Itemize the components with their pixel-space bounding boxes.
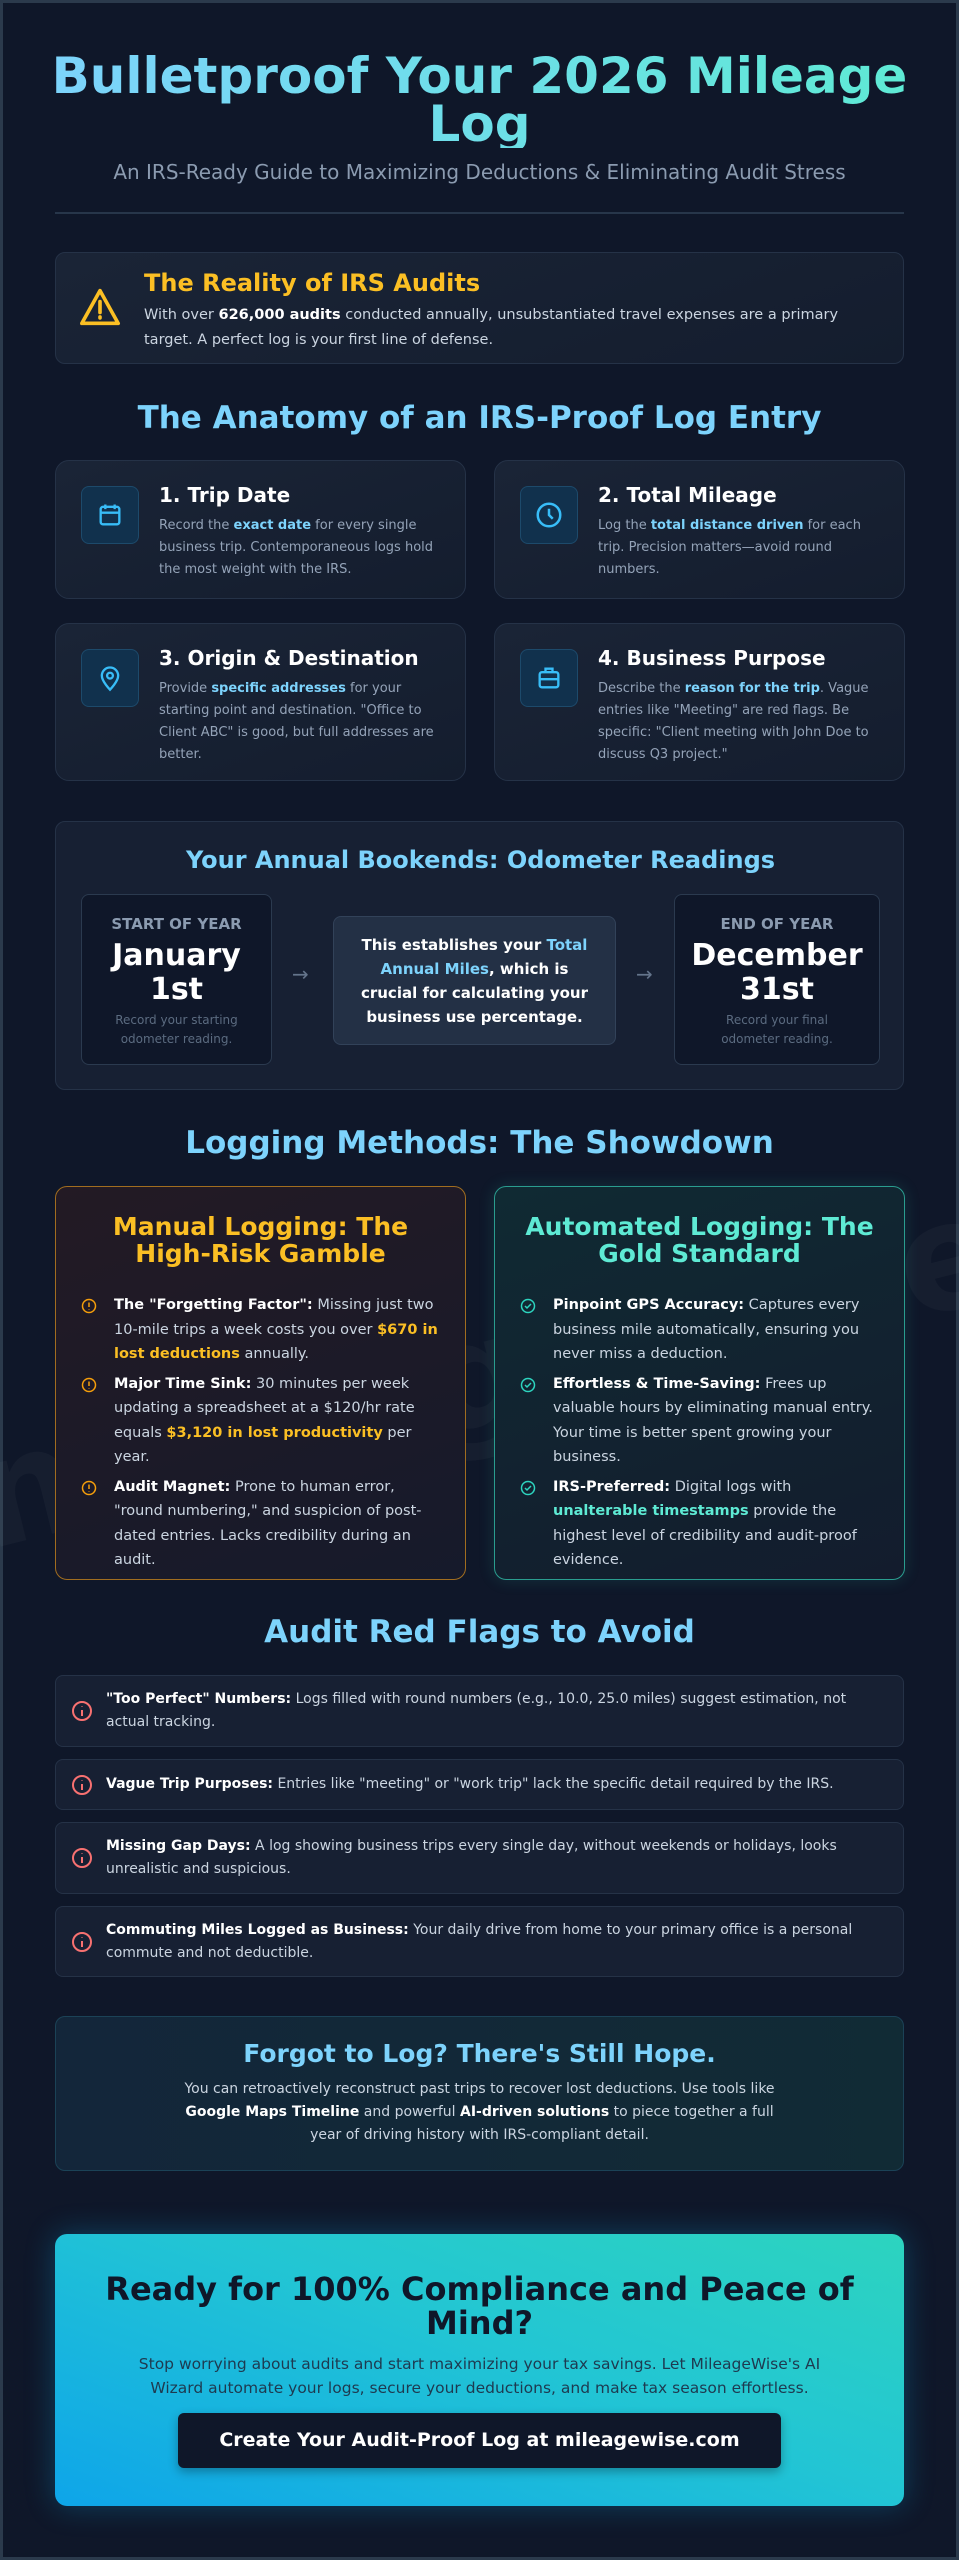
flag 3 [55,1822,904,1894]
flag 1 [55,1675,904,1747]
start of year: odometer reading. [121,1032,232,1046]
heading: logging methods: Logging Methods: The Showdown [185,1125,774,1161]
start of year [81,894,272,1065]
total annual miles callout: This establishes your Total Annual Miles, which is crucial for calculating your business use percentage. [361,936,588,1026]
panel: CTA: Ready for 100% Compliance and Peace of Mind? [105,2270,854,2342]
subtitle: An IRS-Ready Guide to Maximizing Deductions & Eliminating Audit Stress [113,160,846,184]
panel: manual logging [55,1186,466,1580]
manual item 2: Major Time Sink: 30 minutes per week updating a spreadsheet at a $120/hr rate equals $3,120 in lost productivity per year. [114,1376,415,1465]
start of year: START OF YEAR [111,915,242,933]
auto item 2: Effortless & Time-Saving: Frees up valuable hours by eliminating manual entry. Your time is better spent growing your business. [553,1376,873,1465]
audit text [144,269,838,348]
auto item 1: Pinpoint GPS Accuracy: Captures every business mile automatically, ensuring you never miss a deduction. [553,1297,859,1362]
card: origin destination [55,623,466,781]
card: total mileage: 2. Total Mileage [598,483,777,507]
flag 3: Missing Gap Days: A log showing business trips every single day, without weekends or holidays, looks unrealistic and suspicious. [106,1838,837,1877]
heading: red flags: Audit Red Flags to Avoid [264,1614,695,1650]
audit text: The Reality of IRS Audits [144,269,480,297]
icon: warning [80,288,120,326]
flag 1: "Too Perfect" Numbers: Logs filled with round numbers (e.g., 10.0, 25.0 miles) suggest estimation, not actual tracking. [106,1691,846,1730]
end of year: odometer reading. [721,1032,833,1046]
arrow: → [636,962,653,986]
panel: forgot to log [55,2016,904,2171]
card: total mileage: Log the total distance driven for each trip. Precision matters—avoid round numbers. [598,518,861,577]
card: business purpose: Describe the reason for the trip. Vague entries like "Meeting" are red flags. Be specific: "Client meeting with John Doe to discuss Q3 project." [598,681,869,762]
start of year: Record your starting [115,1013,238,1027]
flag 4: Commuting Miles Logged as Business: Your daily drive from home to your primary office is a personal commute and not deductible. [106,1922,852,1960]
arrow: → [292,962,309,986]
end of year: December [691,938,863,973]
flag 2 [55,1759,904,1810]
icon: pin [81,649,139,707]
flag 4 [55,1906,904,1977]
card: origin destination: Provide specific addresses for your starting point and destination. "Office to Client ABC" is good, but full addresses are better. [159,681,434,762]
CTA button [178,2413,781,2468]
start of year: 1st [150,972,203,1007]
automated heading: Automated Logging: The Gold Standard [525,1212,874,1268]
manual item 3: Audit Magnet: Prone to human error, "round numbering," and suspicion of post-dated entries. Lacks credibility during an audit. [114,1478,422,1568]
end of year [674,894,880,1065]
icon: calendar [81,486,139,544]
panel: IRS audits reality [55,252,904,364]
heading: anatomy: The Anatomy of an IRS-Proof Log Entry [138,400,821,436]
start of year: January [112,938,241,973]
panel: forgot to log: Forgot to Log? There's Still Hope. [243,2039,716,2068]
end of year: Record your final [726,1013,828,1027]
bookends heading: Your Annual Bookends: Odometer Readings [186,846,775,874]
card: business purpose [494,623,905,781]
audit text: With over 626,000 audits conducted annually, unsubstantiated travel expenses are a primary target. A perfect log is your first line of defense. [144,307,838,348]
total annual miles callout [333,916,616,1045]
panel: CTA: Stop worrying about audits and start maximizing your tax savings. Let MileageWise's AI Wizard automate your logs, secure your deductions, and make tax season effortless. [139,2355,820,2397]
auto item 3: IRS-Preferred: Digital logs with unalterable timestamps provide the highest level of credibility and audit-proof evidence. [553,1478,857,1568]
panel: forgot to log: You can retroactively reconstruct past trips to recover lost deductions. Use tools like Google Maps Timeline and powerful AI-driven solutions to piece together a full year of driving history with IRS-compliant detail. [184,2081,775,2143]
panel: automated logging [494,1186,905,1580]
end of year: 31st [740,972,814,1007]
end of year: END OF YEAR [721,915,833,933]
card: trip date: 1. Trip Date [159,483,290,507]
manual heading: Manual Logging: The High-Risk Gamble [113,1212,408,1268]
panel: odometer bookends [55,821,904,1090]
card: business purpose: 4. Business Purpose [598,646,826,670]
panel: CTA [55,2234,904,2506]
flag 2: Vague Trip Purposes: Entries like "meeting" or "work trip" lack the specific detail required by the IRS. [106,1776,834,1792]
card: total mileage [494,460,905,599]
card: trip date [55,460,466,599]
icon: briefcase [520,649,578,707]
card: trip date: Record the exact date for every single business trip. Contemporaneous logs hold the most weight with the IRS. [159,518,433,577]
icon: clock [520,486,578,544]
manual item 1: The "Forgetting Factor": Missing just two 10-mile trips a week costs you over $670 in lost deductions annually. [114,1297,438,1362]
title: Bulletproof Your 2026 Mileage Log [52,47,907,153]
CTA button: Create Your Audit-Proof Log at mileagewise.com [219,2429,740,2451]
card: origin destination: 3. Origin & Destination [159,646,419,670]
